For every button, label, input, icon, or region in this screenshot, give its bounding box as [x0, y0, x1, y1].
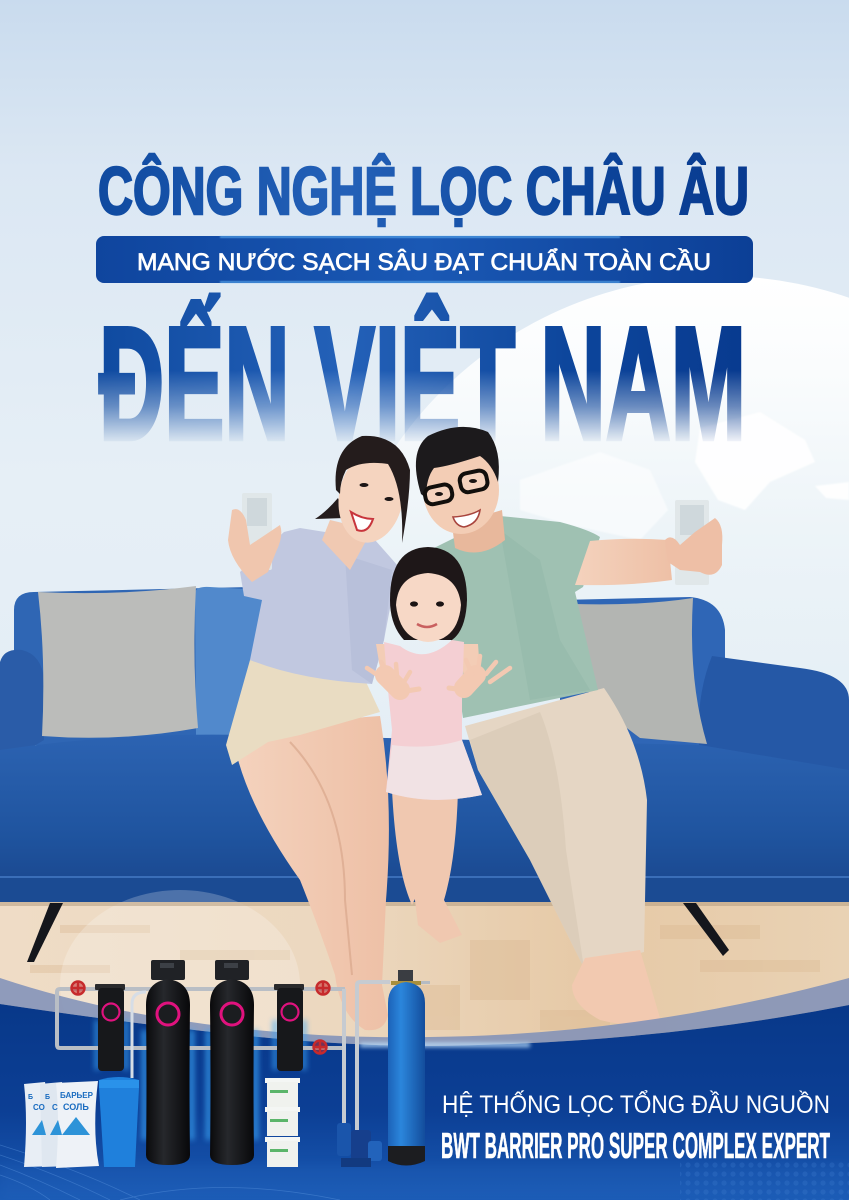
softener tank right	[210, 960, 254, 1165]
girl's eyes and mouth	[410, 601, 444, 627]
salt bags: БАРЬЕР	[60, 1091, 94, 1100]
girl's right hand	[449, 656, 510, 690]
glass: woman	[242, 493, 272, 570]
leg separation	[290, 742, 352, 975]
man's hand	[665, 518, 722, 575]
woman	[226, 436, 411, 1030]
housing filter right	[274, 984, 304, 1071]
girl	[367, 547, 510, 943]
man's eyes	[435, 479, 477, 496]
sofa	[0, 587, 849, 902]
softener tank left	[146, 960, 190, 1165]
girl's legs	[392, 790, 462, 943]
woman's neck	[322, 520, 372, 570]
man's arm	[575, 539, 672, 585]
man	[416, 427, 722, 1025]
man's mouth	[453, 510, 480, 527]
glass: man	[675, 500, 709, 585]
valves	[72, 982, 330, 1054]
man's neck	[452, 510, 505, 552]
girl's arms	[376, 644, 480, 680]
blue curved footer	[0, 978, 849, 1200]
subtitle banner: MANG NƯỚC SẠCH SÂU ĐẠT CHUẨN TOÀN CẦU	[137, 248, 711, 276]
salt bags: СО	[33, 1103, 45, 1112]
sofa cushions	[38, 586, 707, 744]
man's trouser shading	[470, 712, 584, 968]
woman's eyes	[360, 483, 394, 501]
girl's dress	[384, 640, 482, 800]
girl's face	[396, 573, 461, 642]
product caption	[441, 1089, 830, 1166]
woman's hair	[336, 436, 410, 543]
man's shirt	[434, 516, 600, 718]
man's hair	[416, 427, 499, 498]
salt bags: Б	[45, 1094, 50, 1101]
woman's face	[331, 446, 411, 548]
woman's legs	[236, 716, 389, 1030]
salt bags: С	[52, 1103, 58, 1112]
woman's shirt	[240, 528, 398, 684]
wooden floor	[0, 890, 849, 1080]
sofa legs	[27, 903, 729, 962]
globe continents	[520, 412, 849, 540]
brine tank	[99, 1077, 139, 1167]
woman's hand	[228, 509, 281, 582]
man's trousers	[465, 688, 647, 968]
buckets	[265, 1078, 300, 1167]
subtitle banner	[96, 236, 753, 283]
woman's ponytail	[315, 498, 345, 519]
woman's mouth	[351, 512, 373, 531]
man's face	[423, 446, 499, 534]
salt bags: СОЛЬ	[63, 1102, 89, 1112]
girl's hair	[390, 547, 467, 640]
man's foot	[572, 950, 660, 1025]
salt bags: Б	[28, 1094, 33, 1101]
housing filter left	[95, 984, 125, 1071]
blue filter tank	[388, 970, 425, 1166]
pipes	[57, 981, 430, 1130]
woman's shorts	[226, 660, 380, 765]
girl's left hand	[367, 662, 419, 692]
man's glasses	[424, 469, 489, 506]
pump	[337, 1123, 382, 1167]
product glow	[95, 1020, 306, 1140]
salt bags	[24, 1081, 99, 1168]
